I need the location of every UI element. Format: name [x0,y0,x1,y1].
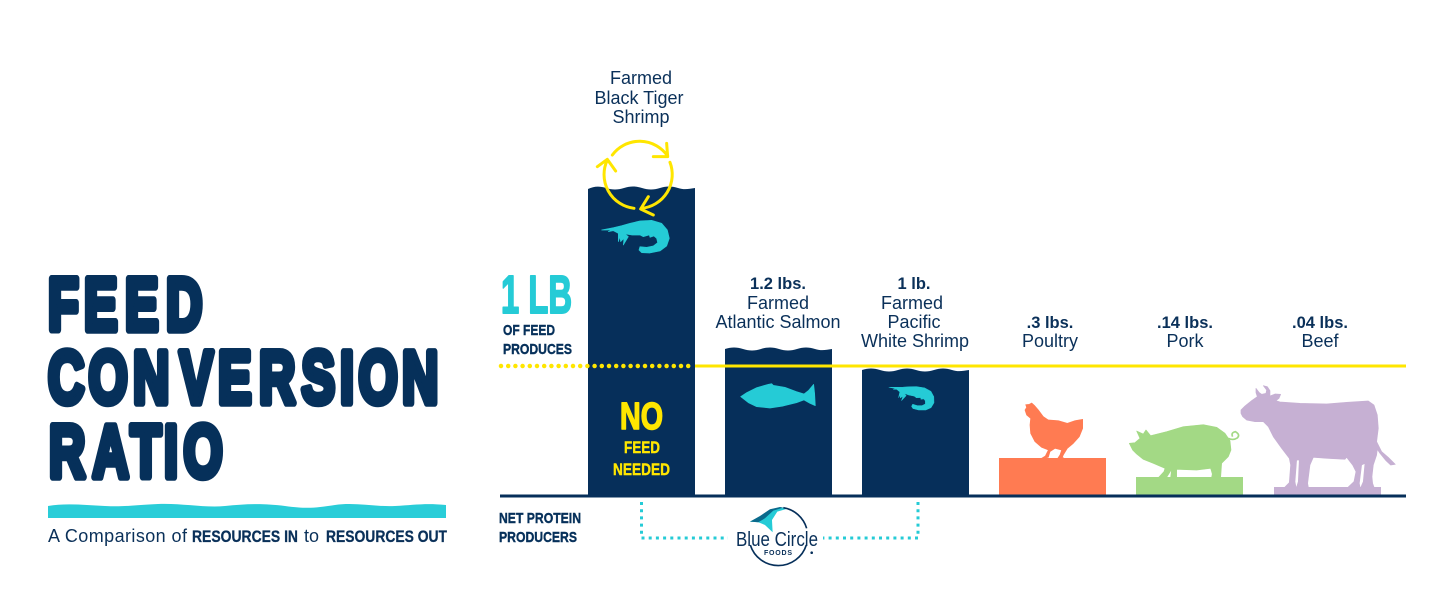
icon: cycle arrows [597,141,672,215]
callout: 1 lb of feed produces: PRODUCES [503,341,572,358]
label: poultry: .3 lbs. [1027,314,1073,332]
label: pacific white shrimp: Pacific [887,312,941,332]
logo: blue circle foods: FOODS [764,550,792,557]
icon: white shrimp [886,381,937,413]
bar: beef [1274,487,1381,495]
subtitle [48,526,447,546]
subtitle: to [304,526,319,546]
logo: blue circle foods [736,507,818,566]
label: pork: Pork [1166,331,1205,351]
logo: blue circle foods: Blue Circle [736,529,818,551]
callout: 1 lb of feed produces: 1 LB [501,265,572,325]
callout: 1 lb of feed produces [501,265,572,358]
callout: no feed needed: NEEDED [613,460,670,479]
callout: 1 lb of feed produces: OF FEED [503,322,555,339]
label: net protein producers: NET PROTEIN [499,510,581,527]
subtitle: RESOURCES IN [192,527,298,546]
label: pork: .14 lbs. [1157,314,1213,332]
icon: hen [1025,403,1083,459]
subtitle: A Comparison of [48,526,188,546]
label: beef [1292,314,1348,351]
wave divider [48,504,446,518]
label: pacific white shrimp: 1 lb. [897,275,931,293]
label: atlantic salmon: Farmed [747,293,809,313]
callout: no feed needed: NO [620,396,663,438]
label: pacific white shrimp: Farmed [881,293,943,313]
baseline [500,494,1406,498]
label: atlantic salmon [715,275,841,332]
label: net protein producers: PRODUCERS [499,529,577,546]
callout: no feed needed: FEED [624,438,660,457]
title: CONVERSION [48,338,438,419]
label: pacific white shrimp: White Shrimp [861,331,969,351]
icon: black tiger shrimp [602,220,669,253]
bar: poultry [999,458,1106,495]
callout: no feed needed [613,396,670,479]
label: black tiger shrimp [594,68,684,127]
label: poultry [1022,314,1078,351]
title: FEED [48,265,202,346]
icon: cow [1241,386,1395,487]
bar: pork [1136,477,1243,495]
icon: salmon [741,384,815,408]
label: atlantic salmon: Atlantic Salmon [715,312,841,332]
label: black tiger shrimp: Farmed [610,68,672,88]
bracket: dotted connector [642,502,918,538]
bar: black tiger shrimp [588,186,695,495]
title [48,265,438,493]
label: atlantic salmon: 1.2 lbs. [750,275,806,293]
label: pacific white shrimp [861,275,969,351]
icon: pig [1129,425,1239,477]
title: RATIO [49,412,223,493]
label: net protein producers [499,510,581,546]
label: black tiger shrimp: Shrimp [612,107,670,127]
label: black tiger shrimp: Black Tiger [594,88,684,108]
bar: pacific white shrimp [862,368,969,495]
label: beef: Beef [1301,331,1340,351]
label: beef: .04 lbs. [1292,314,1348,332]
one pound reference line [501,364,1406,368]
subtitle: RESOURCES OUT [326,527,447,546]
bar: atlantic salmon [725,348,832,495]
label: pork [1157,314,1213,351]
label: poultry: Poultry [1022,331,1078,351]
